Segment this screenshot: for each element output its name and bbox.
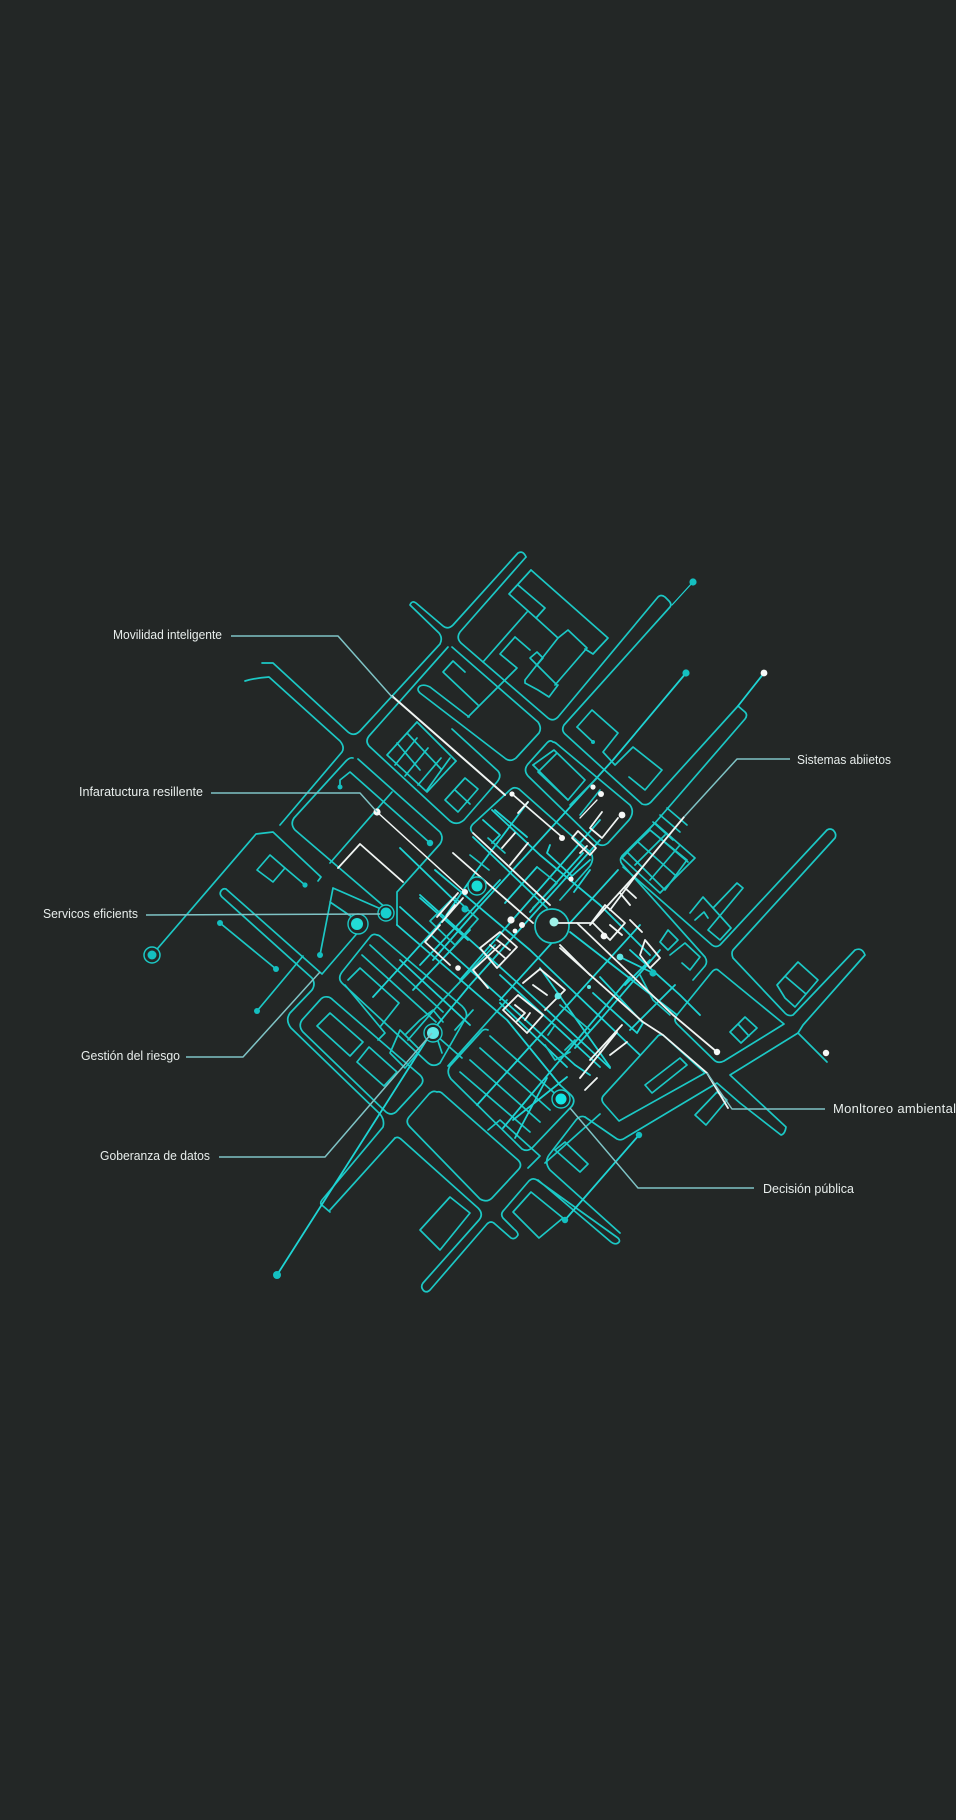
callout: Monitoreo ambiental [707,1073,956,1116]
callout: Infraestructura resiliente [79,784,377,812]
callout: Decision publica: Decisión pública [763,1181,855,1196]
callout: Sistemas abiertos [684,752,891,817]
teal dots [217,578,697,1279]
callout: Gestion del riesgo [81,972,320,1063]
callout: Goberanza de datos: Goberanza de datos [100,1148,210,1163]
center white structures [338,696,728,1108]
ring node Gestion [348,914,368,934]
city street network [152,552,865,1292]
upper block buildings [443,570,608,717]
center small buildings [420,710,818,1250]
callout: Monitoreo ambiental: Monltoreo ambiental [833,1101,956,1116]
callout: Movilidad inteligente: Movilidad inteligente [113,627,222,642]
ring node left [144,947,160,963]
callout: Infraestructura resiliente: Infaratuctura resillente [79,784,203,799]
center circle hub [535,909,569,943]
hub dot [550,918,558,926]
ring node Infraestructura [468,877,486,895]
bright dots [555,954,623,999]
callout: Sistemas abiertos: Sistemas abiietos [797,752,891,767]
ring node Servicos [378,905,394,921]
callout: Servicios eficientes: Servicos eficients [43,906,138,921]
block C inner [220,772,430,1011]
ring node Goberanza [424,1024,442,1042]
callout: Decision publica [570,1108,855,1196]
center streets: NW-SE [397,810,700,1085]
streets: outer outlines [152,552,865,1292]
callout: Movilidad inteligente [113,627,393,698]
network nodes [144,578,829,1279]
callout: Goberanza de datos [100,1033,432,1163]
rows block [387,722,478,812]
ring node Decision [552,1090,570,1108]
white dots [373,670,829,1056]
block interiors lower left [317,945,560,1168]
center streets: NE-SW [277,582,764,1275]
callout: Gestion del riesgo: Gestión del riesgo [81,1048,180,1063]
